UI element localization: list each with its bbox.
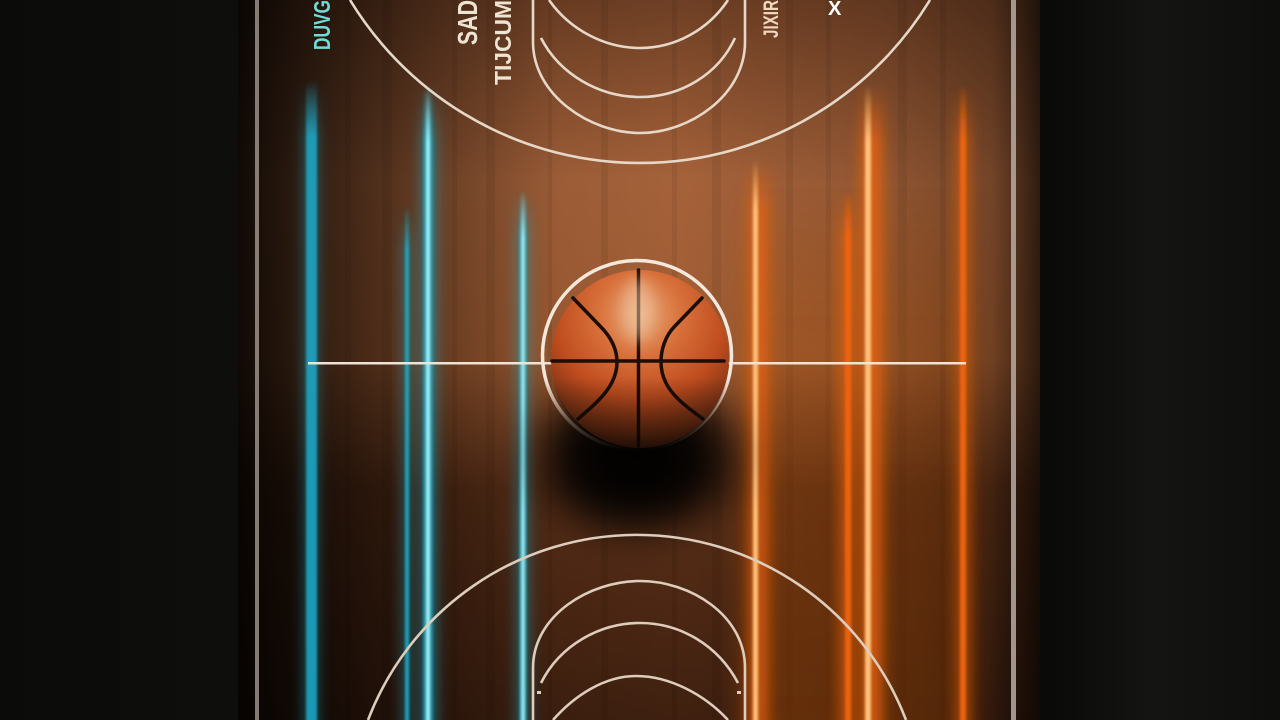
neon lines: orange team side: [750, 85, 969, 720]
bottom court markings: [368, 535, 906, 720]
top court markings: [350, 0, 930, 163]
top key outline: [533, 0, 745, 133]
top three-point arc: [350, 0, 930, 163]
bottom three-point arc: [368, 535, 906, 720]
ball lower shade: [550, 269, 730, 449]
basketball: [550, 269, 730, 449]
cropped labels at top edge: [309, 0, 842, 85]
halfway line: [308, 362, 966, 364]
top middle arc: [541, 38, 735, 97]
ball shadow: [519, 363, 755, 547]
bottom key outline: [533, 581, 745, 720]
ball seams: [552, 270, 724, 446]
wooden court floor: [238, 0, 1040, 720]
neon lines: cyan team side: [304, 80, 529, 720]
bottom middle arc: [541, 623, 738, 683]
bottom inner arc: [553, 676, 728, 720]
key dots: [539, 691, 739, 694]
ball highlight: [622, 278, 654, 342]
top inner arc: [549, 0, 728, 48]
center circle ring: [542, 260, 732, 450]
court sidelines: [255, 0, 1016, 720]
label: tijcum fragment: TIJCUM: [490, 0, 516, 85]
